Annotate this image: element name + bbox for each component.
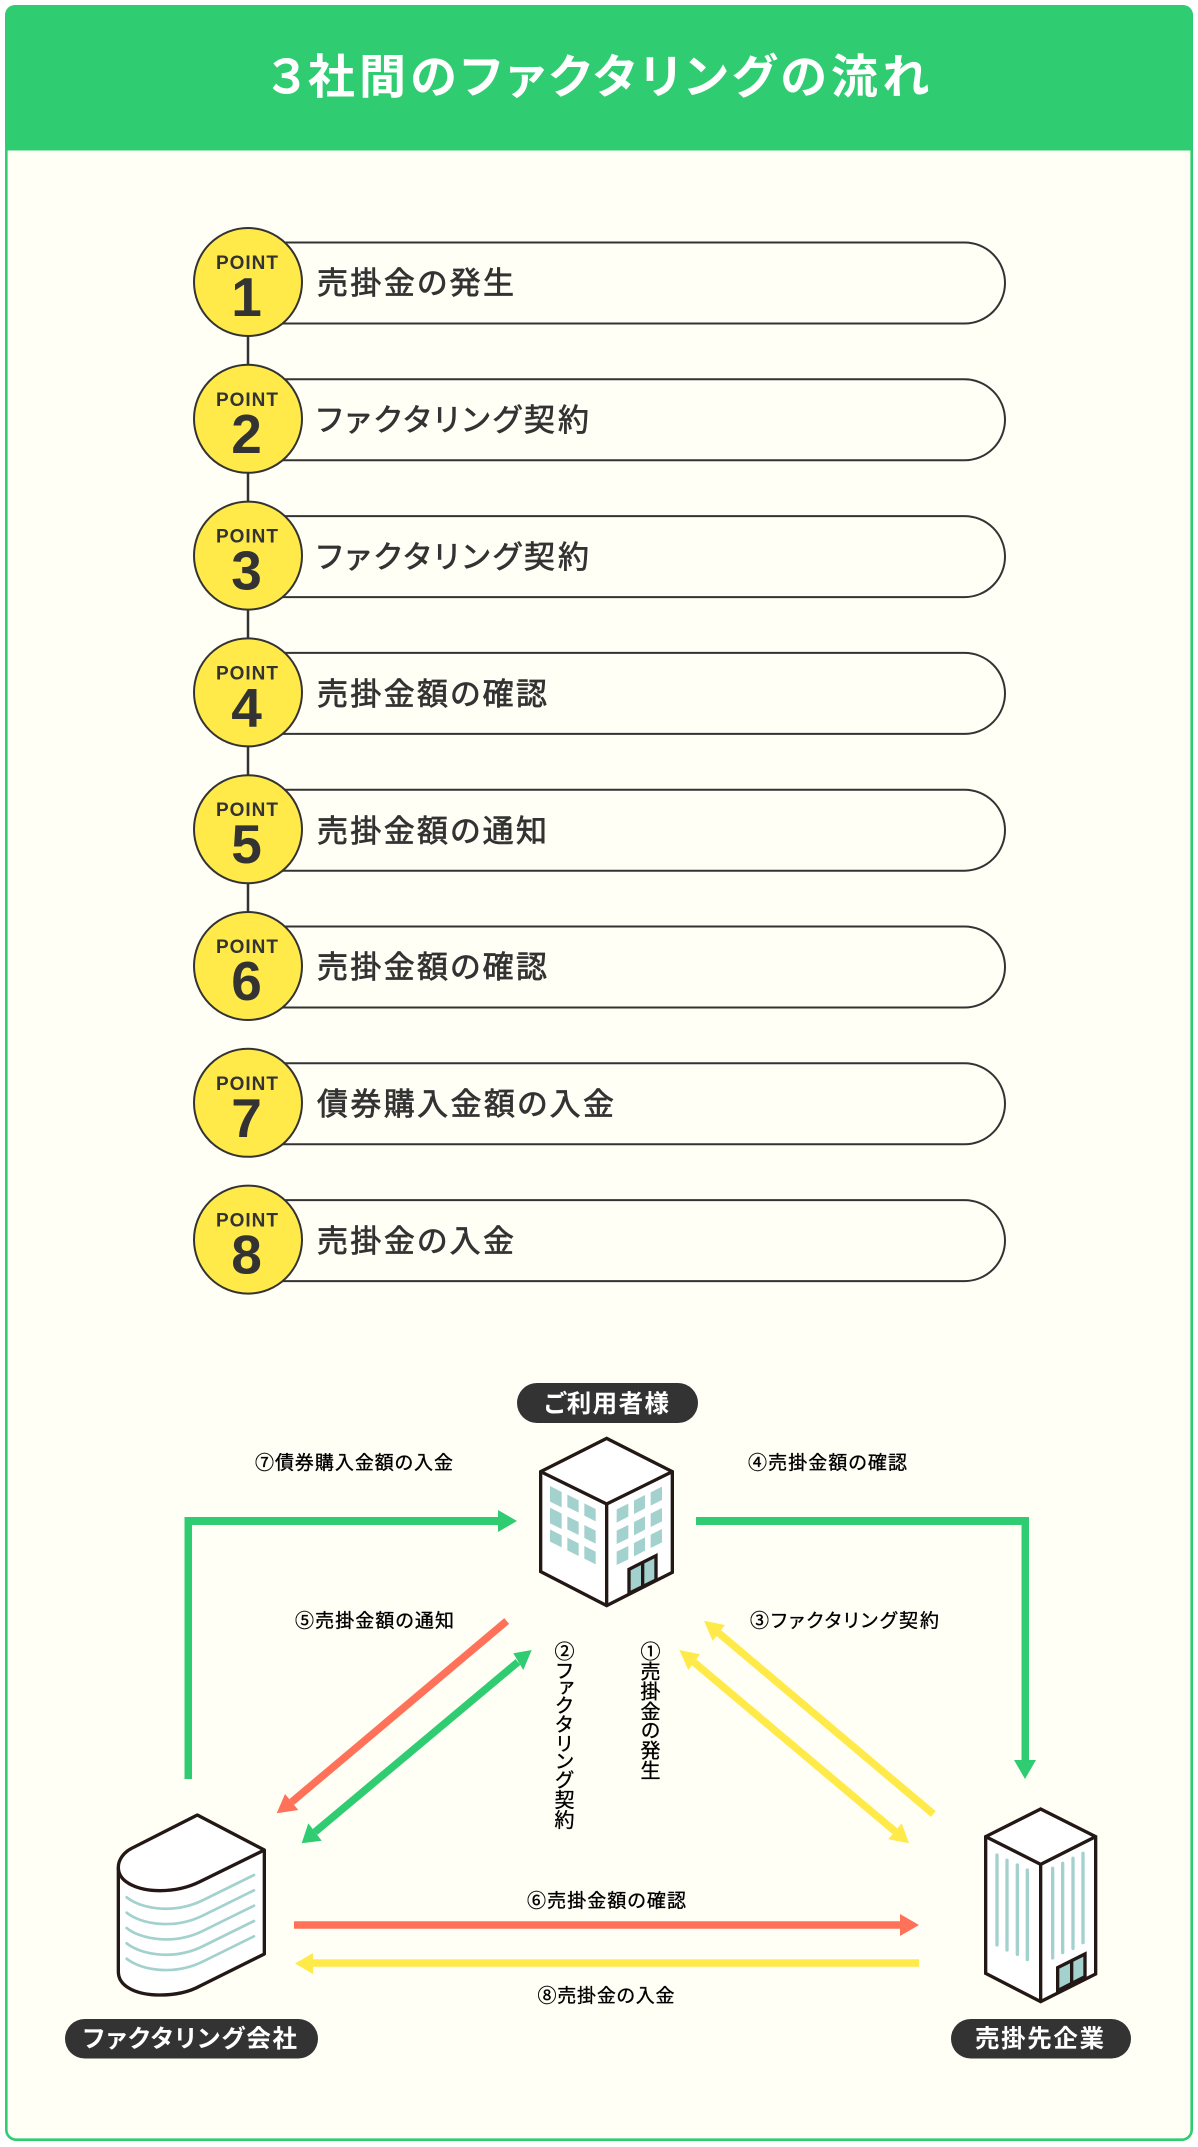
point 5 row: 5 — [231, 813, 262, 875]
point 7 row — [194, 1049, 1005, 1157]
point 7 row: POINT — [216, 1074, 278, 1095]
point 3 row: POINT — [216, 527, 278, 548]
title: ３社間のファクタリングの流れ — [268, 50, 929, 104]
icon: factoring company building — [118, 1815, 264, 1995]
point 8 row: POINT — [216, 1211, 278, 1232]
point 2 row: 2 — [231, 403, 262, 465]
point 6 row: 6 — [231, 950, 262, 1012]
label 1 vertical: ①売掛金の発生 — [637, 1641, 660, 1780]
point 4 row: POINT — [216, 663, 278, 684]
tag: factoring company — [65, 2019, 318, 2058]
icon: user company building — [541, 1438, 672, 1606]
point 4 row: 4 — [231, 676, 262, 738]
point 1 row — [194, 228, 1005, 336]
label 6: ⑥売掛金額の確認 — [527, 1890, 686, 1912]
tag: customer company — [951, 2019, 1131, 2058]
arrow: green from factoring to user — [184, 1510, 517, 1779]
tag: user company: ご利用者様 — [544, 1389, 670, 1418]
label 8: ⑧売掛金の入金 — [538, 1985, 674, 2007]
label 5: ⑤売掛金額の通知 — [295, 1610, 454, 1632]
point 8 row — [194, 1186, 1005, 1294]
point 6 row — [194, 912, 1005, 1020]
point 3 row: ファクタリング契約 — [316, 540, 589, 575]
label 3: ③ファクタリング契約 — [750, 1610, 939, 1632]
point 2 row: POINT — [216, 390, 278, 411]
point 8 row: 8 — [231, 1224, 262, 1286]
point 3 row: 3 — [231, 540, 262, 602]
arrow: yellow double between user and customer — [679, 1650, 909, 1843]
arrow: yellow from customer to factoring — [295, 1953, 919, 1974]
label 4: ④売掛金額の確認 — [748, 1452, 907, 1474]
point 1 row: 1 — [231, 266, 262, 328]
arrow: green from user to customer — [696, 1517, 1036, 1779]
icon: customer company building — [986, 1809, 1096, 2002]
point 4 row: 売掛金額の確認 — [317, 677, 547, 712]
point 2 row — [194, 365, 1005, 473]
tag: user company — [517, 1383, 698, 1423]
tag: customer company: 売掛先企業 — [975, 2025, 1104, 2053]
arrow: red from user to factoring — [277, 1621, 507, 1813]
tag: factoring company: ファクタリング会社 — [83, 2024, 297, 2053]
arrow: yellow from customer to user — [704, 1621, 933, 1814]
arrow: green double between user and factoring — [302, 1650, 532, 1843]
point 6 row: POINT — [216, 937, 278, 958]
arrow: red from factoring to customer — [294, 1914, 919, 1936]
point 5 row: POINT — [216, 800, 278, 821]
point 5 row: 売掛金額の通知 — [317, 814, 547, 849]
point 6 row: 売掛金額の確認 — [317, 950, 547, 985]
point 2 row: ファクタリング契約 — [316, 403, 589, 438]
point 3 row — [194, 502, 1005, 610]
point 1 row: 売掛金の発生 — [317, 266, 514, 301]
header band — [5, 5, 1193, 150]
label 7: ⑦債券購入金額の入金 — [255, 1452, 453, 1474]
point 1 row: POINT — [216, 253, 278, 274]
point 7 row: 債券購入金額の入金 — [317, 1087, 614, 1122]
connector line between points 1 to 6 — [247, 282, 249, 966]
point 4 row — [194, 638, 1005, 746]
point 8 row: 売掛金の入金 — [317, 1224, 514, 1259]
point 7 row: 7 — [231, 1087, 262, 1149]
point 5 row — [194, 775, 1005, 883]
label 2 vertical: ②ファクタリング契約 — [551, 1641, 574, 1829]
